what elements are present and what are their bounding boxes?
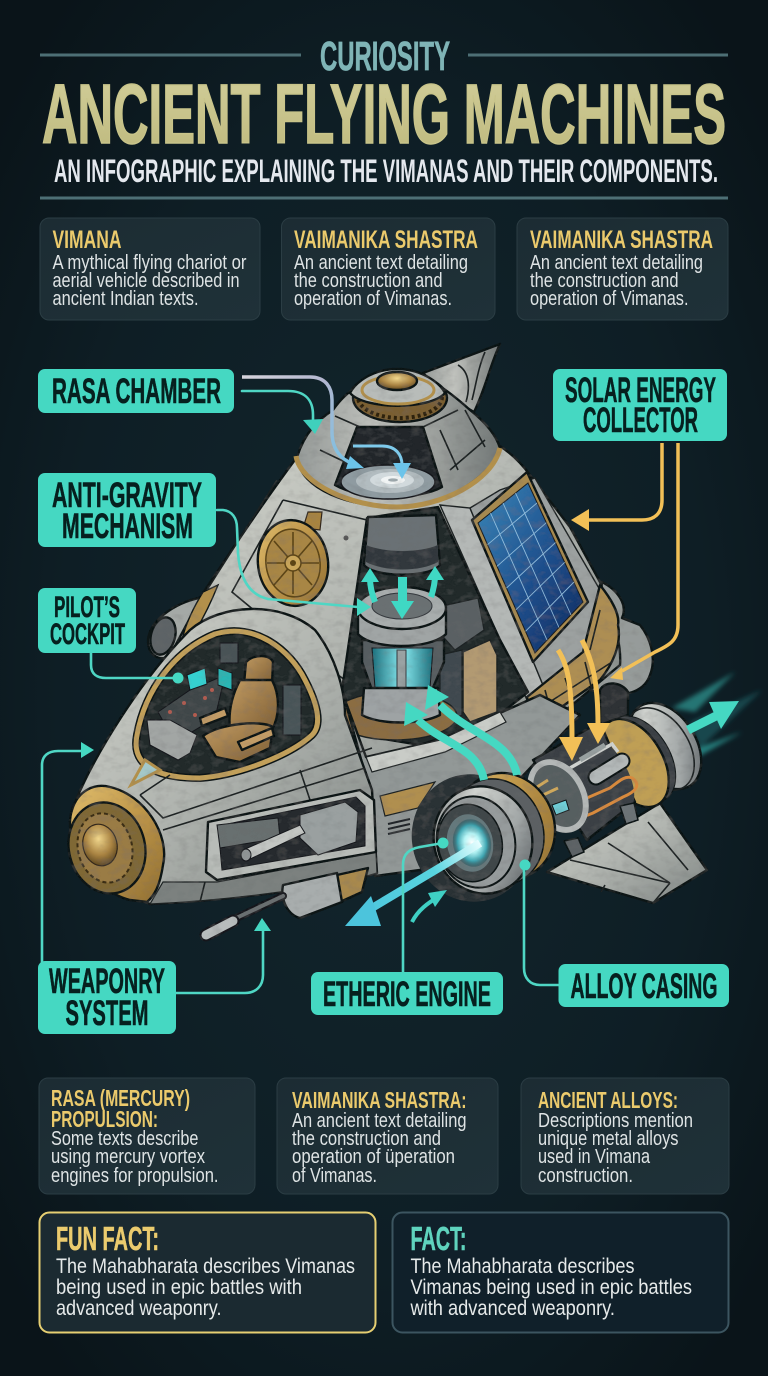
cockpit consoles (147, 643, 301, 760)
arrow: rasa chamber teal (242, 391, 323, 434)
panel: vaimanika shastra 2: operation of Vimanas. (530, 288, 688, 310)
panel: vaimanika shastra 3: the construction and (292, 1128, 441, 1150)
interior crate (437, 598, 497, 725)
label: etheric engine (311, 972, 503, 1015)
cone panel lines (182, 478, 612, 700)
engine glow (448, 816, 496, 870)
nose cone (59, 786, 164, 902)
panel: rasa propulsion: PROPULSION: (51, 1106, 158, 1132)
gun bay (206, 790, 376, 880)
rear silver cap (614, 690, 716, 802)
engine recess (397, 761, 547, 915)
nose window (131, 760, 160, 785)
pilot seat (200, 656, 278, 762)
label: weaponry system: SYSTEM (66, 994, 148, 1033)
dome gold band (296, 448, 500, 507)
label: solar energy collector (553, 369, 727, 441)
label: rasa chamber (38, 369, 234, 413)
kicker: curiosity: CURIOSITY (320, 33, 450, 79)
callout: fun fact: FUN FACT: (56, 1220, 159, 1257)
panel: ancient alloys: ANCIENT ALLOYS: (538, 1087, 678, 1113)
panel: vaimanika shastra 2: the construction and (530, 270, 678, 292)
vimana illustration (59, 344, 716, 935)
panel: rasa propulsion: engines for propulsion. (51, 1165, 218, 1187)
arrow: etheric leader (403, 838, 448, 972)
engine front housing (422, 775, 544, 905)
callout: fun fact: being used in epic battles with (56, 1275, 302, 1299)
main cone hull (165, 445, 620, 800)
dome gold cap (377, 372, 417, 390)
callout: fun fact: The Mahabharata describes Vimanas (56, 1254, 355, 1278)
orange wire (570, 777, 637, 822)
label: pilot's cockpit: PILOT’S (54, 591, 120, 624)
panel: vaimanika shastra 1: VAIMANIKA SHASTRA (294, 226, 478, 254)
panel: rasa propulsion: Some texts describe (51, 1128, 198, 1150)
panel: vimana: ancient Indian texts. (52, 288, 198, 310)
panel: vaimanika shastra 3: of Vimanas. (292, 1165, 377, 1187)
callout: fact: FACT: (410, 1220, 466, 1257)
machinery tubes (596, 761, 622, 777)
gold inset panel (380, 782, 435, 816)
panel: ancient alloys: used in Vimana (538, 1146, 651, 1168)
callout: fact: The Mahabharata describes (410, 1254, 634, 1278)
arrows and leader lines (42, 377, 739, 993)
mercury vortex (341, 465, 435, 499)
panel: vimana: A mythical flying chariot or (52, 252, 247, 274)
arrow: energy down 2 (582, 640, 610, 744)
label: anti-gravity mechanism: MECHANISM (62, 507, 193, 546)
dome collar (353, 374, 447, 422)
panel: ancient alloys: construction. (538, 1165, 633, 1187)
gold skirt (527, 585, 619, 727)
lower hull (75, 609, 377, 904)
interior cavity (342, 507, 528, 745)
callout: fun fact: advanced weaponry. (56, 1296, 222, 1320)
arrow: rasa inner blue (353, 446, 411, 479)
panel: vaimanika shastra 1: the construction and (294, 270, 442, 292)
panel: ancient alloys (521, 1078, 729, 1194)
panel: vaimanika shastra 1: operation of Vimanas. (294, 288, 452, 310)
arrow: weaponry left (42, 742, 94, 962)
header (40, 33, 728, 200)
cockpit (131, 631, 318, 785)
dome window (335, 427, 442, 497)
emblem: gold medallion (252, 512, 334, 610)
panel: vaimanika shastra 2 (517, 218, 728, 320)
panel: vimana (40, 218, 260, 320)
label: alloy casing (558, 964, 729, 1007)
label: pilot's cockpit (38, 588, 136, 653)
arrow: weaponry right (176, 918, 271, 993)
label: pilot's cockpit: COCKPIT (50, 618, 125, 651)
arrow: solar to pod (610, 443, 678, 680)
arrow: engine rear (688, 701, 739, 730)
panel: vaimanika shastra 1: An ancient text detailing (294, 252, 468, 274)
hull seams (140, 748, 372, 902)
arrow: rasa chamber grey (242, 377, 364, 469)
wing brackets (620, 803, 638, 824)
lower cannon (206, 868, 368, 935)
wing (547, 803, 707, 903)
arrow: solar to panel (571, 443, 662, 531)
rear gold ring (585, 707, 683, 819)
exhaust plume rear (672, 672, 762, 758)
arrow: engine flow 1 (404, 702, 484, 780)
panel: rasa propulsion: using mercury vortex (51, 1146, 205, 1168)
engine gold ring (440, 757, 572, 895)
side pods (146, 582, 653, 725)
panel: rasa propulsion: RASA (MERCURY) (51, 1085, 190, 1111)
arrow: energy down 1 (558, 650, 583, 761)
dome (296, 369, 500, 507)
kicker: curiosity (40, 33, 728, 79)
panel: vaimanika shastra 3: operation of üperation (292, 1146, 455, 1168)
callout: fact (392, 1212, 728, 1332)
label: weaponry system: WEAPONRY (49, 962, 165, 1001)
callout: fun fact (40, 1212, 376, 1332)
panel: vimana: VIMANA (52, 226, 122, 254)
engine intake (428, 788, 524, 896)
panel: ancient alloys: Descriptions mention (538, 1110, 693, 1132)
panel: vaimanika shastra 3: VAIMANIKA SHASTRA: (292, 1087, 466, 1113)
label: weaponry system (38, 961, 176, 1034)
arrow: engine flow 2 (425, 685, 517, 775)
arrow: levitation left (361, 568, 379, 602)
callout: fact: with advanced weaponry. (410, 1296, 615, 1320)
engine tooth band (435, 766, 559, 898)
engine rear section (516, 690, 716, 857)
panel: rasa propulsion (39, 1078, 255, 1194)
panel: vaimanika shastra 1 (282, 218, 495, 320)
arrow: pilot leader (91, 653, 184, 684)
panel: vimana: aerial vehicle described in (52, 270, 240, 292)
panel: vaimanika shastra 2: An ancient text detailing (530, 252, 703, 274)
arrow: levitation center (391, 577, 414, 619)
label: rasa chamber: RASA CHAMBER (52, 372, 221, 411)
wood floor (333, 692, 457, 740)
beam arrow (345, 843, 480, 926)
rear fin (423, 344, 500, 412)
callout: fact: Vimanas being used in epic battles (410, 1275, 692, 1299)
hull underside shading (150, 852, 377, 904)
label: etheric engine: ETHERIC ENGINE (323, 975, 491, 1014)
rear teeth band (592, 704, 690, 814)
arrow: levitation right (426, 566, 444, 597)
arrow: anti-gravity leader (217, 510, 371, 616)
machinery housing (533, 722, 635, 840)
solar panel (472, 472, 588, 662)
reactor column (358, 515, 446, 722)
panel: ancient alloys: unique metal alloys (538, 1128, 678, 1150)
label: anti-gravity mechanism (38, 473, 216, 547)
label: anti-gravity mechanism: ANTI-GRAVITY (52, 476, 202, 515)
mid deck (345, 695, 580, 915)
panel: vaimanika shastra 3: An ancient text detailing (292, 1110, 466, 1132)
panel: vaimanika shastra 3 (277, 1078, 498, 1194)
arrow: alloy leader (520, 860, 558, 985)
machinery ring (516, 750, 600, 842)
